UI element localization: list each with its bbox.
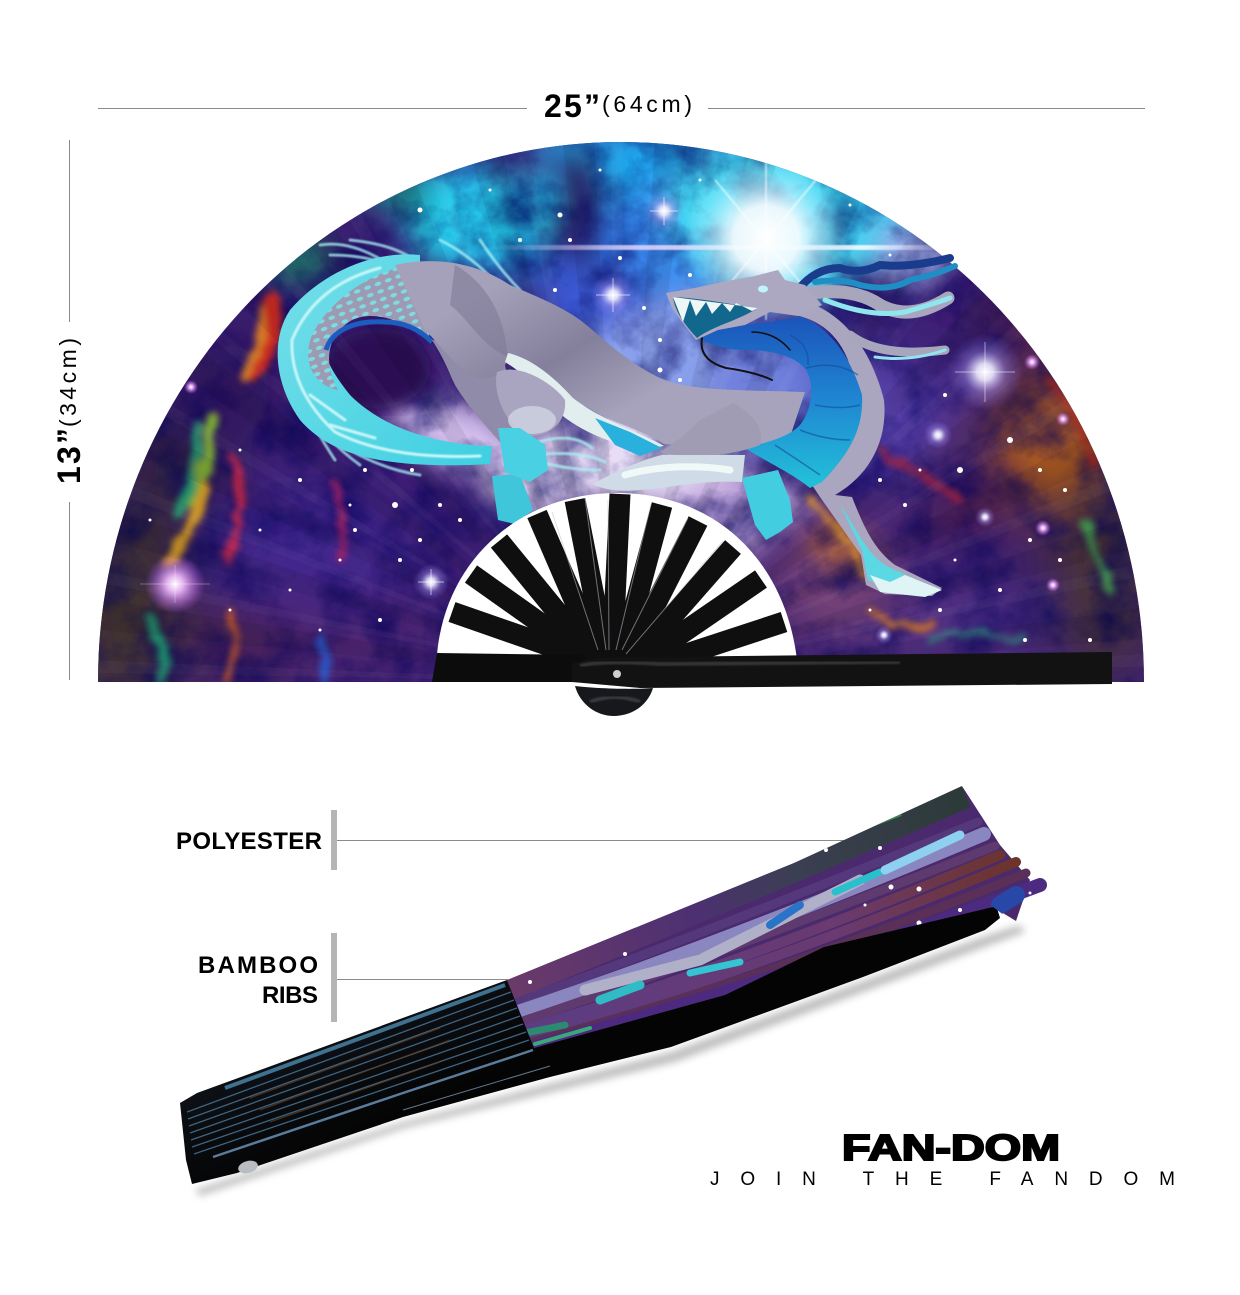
dragon body [395, 261, 805, 450]
rainbow nebula streaks [150, 300, 1112, 682]
width dimension: 25" (64cm): 25” [544, 88, 600, 124]
handle rib highlights [187, 992, 529, 1154]
width dimension: 25" (64cm) [98, 88, 1145, 124]
label: bamboo ribs [198, 933, 508, 1022]
brand logo: FAN-DOM [842, 1127, 1060, 1168]
closed fan dragon print [585, 880, 860, 990]
open fan [98, 142, 1144, 716]
star flare band [490, 245, 960, 250]
height dimension: 13" (34cm): (34cm) [55, 338, 81, 427]
fabric fold shading [280, 342, 960, 1022]
dragon hind leg cyan [840, 505, 935, 590]
height dimension: 13" (34cm): 13” [51, 428, 87, 484]
dragon front limb cream fur [592, 455, 745, 491]
brand logo: JOIN THE FANDOM [710, 1169, 1175, 1190]
dragon front foot [742, 470, 793, 540]
closed fan rivet [237, 1159, 259, 1175]
dragon scaled flank [308, 265, 430, 390]
handle brown grain [250, 1028, 450, 1122]
material labels [176, 810, 850, 1022]
knee joint [660, 403, 761, 456]
blue edge of tail curl [326, 322, 432, 350]
label: bamboo ribs: RIBS [262, 982, 318, 1009]
dark nebula mottling [90, 135, 1150, 690]
dragon tail highlights [292, 268, 480, 456]
dragon tail fin feathers [290, 240, 605, 475]
label: polyester: POLYESTER [176, 828, 322, 855]
dragon head [666, 270, 822, 340]
dragon tail [278, 254, 492, 465]
dragon hair [702, 258, 955, 380]
rib highlights [552, 498, 723, 654]
closed fan [180, 786, 1040, 1196]
closed fan shadow [195, 925, 1025, 1196]
bright stars [140, 191, 1070, 644]
closed fan folded fabric [505, 786, 1040, 1048]
fan fabric: galaxy print [98, 142, 1144, 682]
base stick right [572, 652, 1112, 688]
dragon mouth [673, 297, 758, 338]
dragon hind leg fuzzy back [432, 340, 520, 448]
dragon hind thigh [496, 370, 565, 436]
small stars [148, 168, 1092, 642]
neck plate lines [775, 335, 860, 475]
stick sheen [580, 662, 900, 666]
dark hollow inside tail curl [326, 328, 430, 408]
width dimension: 25" (64cm): (64cm) [602, 91, 692, 117]
dragon rear foot [498, 428, 548, 482]
dragon rear leg lower [492, 474, 533, 524]
brand logo [710, 1127, 1175, 1190]
dragon illustration [278, 240, 955, 597]
blue under belly strip [595, 418, 662, 456]
central white opening [437, 493, 797, 660]
closed fan black back and handle [180, 895, 1000, 1184]
pivot hub [575, 670, 653, 716]
label: bamboo ribs: BAMBOO [198, 952, 318, 979]
bamboo ribs [452, 494, 784, 666]
central white burst [684, 155, 848, 320]
height dimension: 13" (34cm) [51, 140, 87, 680]
dragon cream belly fur [505, 353, 664, 450]
dragon blue neck and belly [700, 317, 862, 488]
handle top and lower sheen [213, 985, 550, 1157]
dragon neck back [795, 300, 942, 596]
rear foot pale [870, 575, 942, 597]
base stick left [432, 653, 585, 682]
label: polyester [176, 810, 850, 870]
dragon eye [758, 286, 768, 292]
body shading [450, 265, 508, 357]
